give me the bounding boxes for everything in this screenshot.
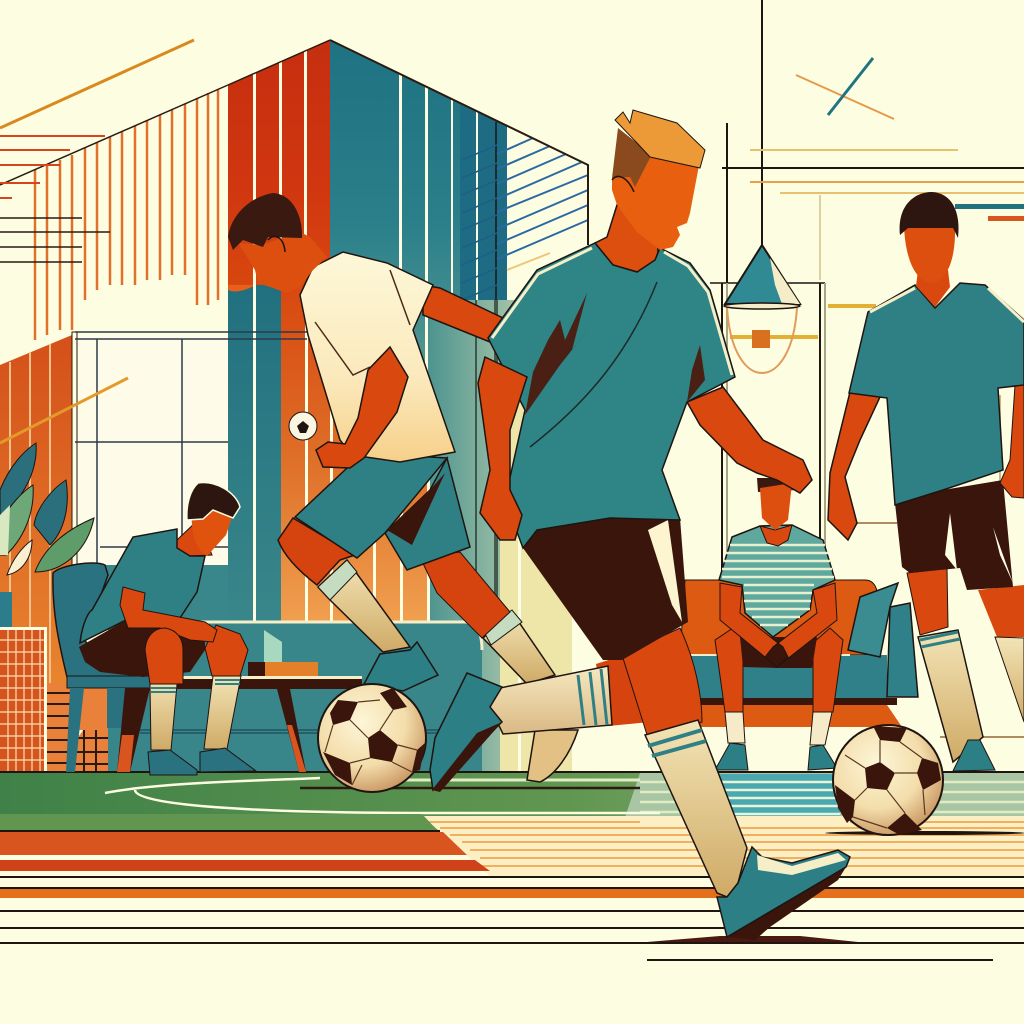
head xyxy=(900,192,959,307)
building: striped roof section xyxy=(0,85,228,340)
plants xyxy=(0,443,94,627)
pendant lamp xyxy=(724,245,800,373)
seated boy: sock bands xyxy=(151,680,240,692)
back leg shoe xyxy=(527,730,578,782)
basket net xyxy=(0,627,47,773)
front leg thigh xyxy=(278,518,355,585)
floor: striped court xyxy=(0,814,1024,961)
right arm xyxy=(687,387,812,493)
head xyxy=(760,483,792,530)
front leg band xyxy=(318,560,357,600)
near sock xyxy=(918,630,983,762)
building: pale fading column xyxy=(430,300,572,775)
far sock xyxy=(995,637,1024,722)
seated boy: shorts xyxy=(79,618,205,677)
shirt sleeve fold xyxy=(315,270,410,375)
white shirt player xyxy=(228,193,578,782)
back leg band xyxy=(483,610,522,645)
left arm xyxy=(828,392,880,540)
legs xyxy=(715,628,843,712)
kicking shoe sole xyxy=(432,722,502,792)
shorts highlights xyxy=(945,513,1013,583)
right soccer ball xyxy=(825,725,1024,835)
seated man on sofa xyxy=(715,478,843,770)
head xyxy=(612,110,705,250)
main player xyxy=(430,110,858,942)
neck xyxy=(760,525,792,546)
brick stripes beside net xyxy=(47,683,108,773)
back leg sock xyxy=(483,612,555,684)
shorts near leg xyxy=(385,458,470,570)
striped shirt xyxy=(719,525,835,637)
right standing player xyxy=(828,192,1024,771)
kicking leg knee xyxy=(596,650,650,726)
lower left orange wall xyxy=(0,335,72,690)
front arm xyxy=(316,347,408,468)
ear and face xyxy=(612,150,700,250)
coffee table xyxy=(150,662,362,772)
back leg calf xyxy=(420,552,510,638)
building: red wall panel xyxy=(228,40,330,292)
standing leg thigh xyxy=(622,628,702,738)
standing leg sock xyxy=(645,720,747,897)
seated boy: socks xyxy=(150,676,241,750)
seated boy: far leg xyxy=(205,625,248,676)
left arm xyxy=(478,357,527,540)
seated boy: face xyxy=(192,505,236,556)
front leg sock xyxy=(318,560,410,652)
teal sofa back behind table xyxy=(108,622,482,772)
shirt xyxy=(300,252,455,462)
standing leg bands xyxy=(648,730,706,756)
socks xyxy=(725,712,832,745)
shorts highlight xyxy=(648,520,682,622)
shorts xyxy=(740,637,817,668)
standing shoe sole xyxy=(727,867,846,940)
shirt shadow right xyxy=(687,345,705,402)
shirt shadow left xyxy=(525,293,590,415)
far leg xyxy=(978,585,1024,637)
near shoe xyxy=(953,740,995,771)
left soccer ball xyxy=(318,684,426,792)
decorative accent lines top right xyxy=(710,0,1024,737)
hair top xyxy=(615,110,705,168)
near sock bands xyxy=(920,632,960,647)
seated boy: near leg xyxy=(145,628,183,684)
seated boy: hair xyxy=(187,483,240,520)
hair side xyxy=(612,128,650,187)
shadow xyxy=(647,936,858,942)
shirt shoulder rim xyxy=(492,248,732,375)
kicking leg sock xyxy=(490,666,612,734)
orange sofa xyxy=(680,580,918,727)
shorts far leg xyxy=(295,453,447,558)
shoe highlight xyxy=(757,853,846,875)
chair xyxy=(53,563,157,772)
kicking shoe xyxy=(430,673,502,790)
shorts xyxy=(523,518,688,660)
seated boy: neck xyxy=(177,520,212,556)
decorative accent lines top left xyxy=(0,40,194,443)
shirt rim xyxy=(870,288,1024,322)
near leg xyxy=(907,568,948,635)
window xyxy=(72,332,307,568)
front shoe xyxy=(364,642,438,691)
shoes xyxy=(715,743,837,770)
shirt folds xyxy=(530,282,657,447)
seated boy left xyxy=(79,483,256,775)
right hand xyxy=(1000,385,1024,498)
arms xyxy=(720,583,837,667)
shorts shadow xyxy=(387,473,445,545)
building: lower orange column xyxy=(281,285,481,625)
neck xyxy=(595,205,658,272)
small ball on wall xyxy=(289,412,317,440)
ear outline xyxy=(612,176,634,192)
standing shoe xyxy=(717,847,850,937)
rear arm xyxy=(423,285,503,342)
seated boy: shirt xyxy=(80,529,205,643)
building: lower teal column xyxy=(228,285,281,625)
building: teal wall panel xyxy=(330,40,588,410)
shorts xyxy=(895,480,1013,590)
kicking leg bands xyxy=(578,669,607,725)
shirt xyxy=(849,283,1024,505)
head hair xyxy=(757,478,797,492)
seated boy: arm xyxy=(120,587,217,642)
seated boy: shoes xyxy=(148,748,256,775)
floor: green court xyxy=(0,772,1024,832)
head xyxy=(228,193,327,293)
shirt xyxy=(488,243,735,548)
teal room wall under window xyxy=(72,565,228,625)
